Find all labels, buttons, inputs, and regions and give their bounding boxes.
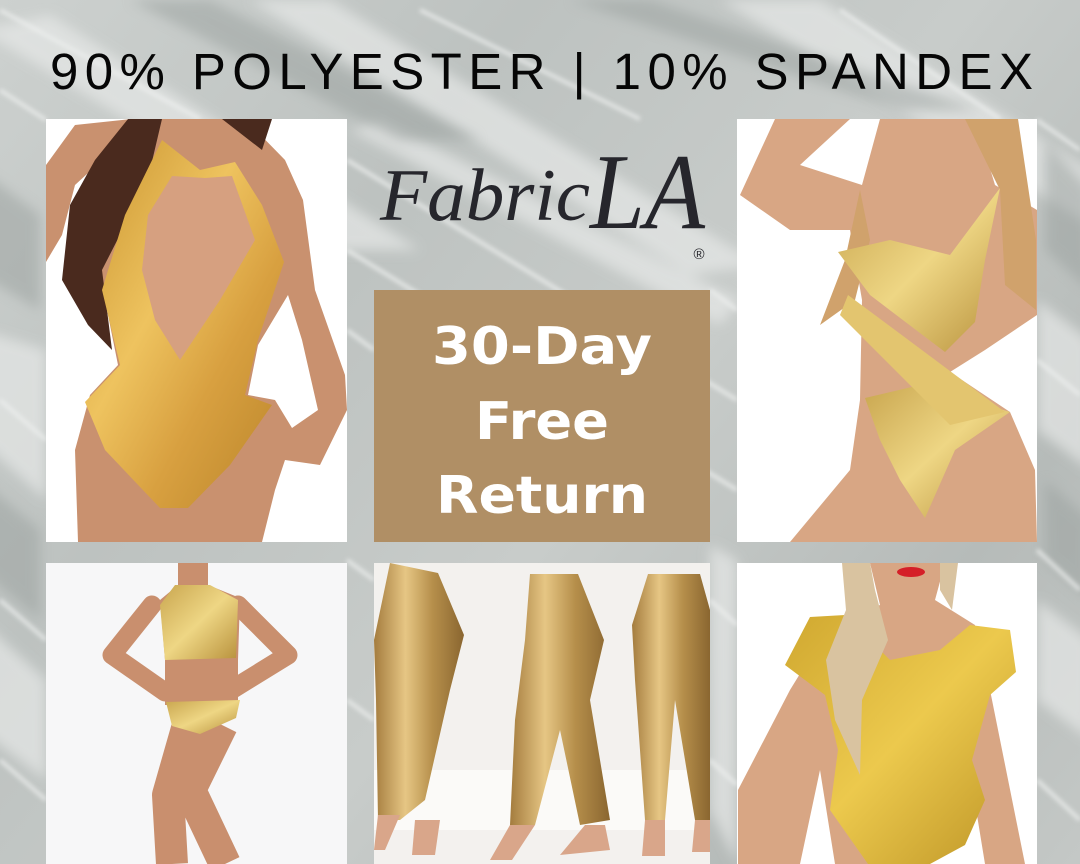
- face and arms: [738, 563, 1025, 864]
- cross strap: [840, 295, 1005, 425]
- return text: [432, 317, 652, 526]
- return text: 30-Day: [432, 317, 652, 377]
- registered mark: ®: [693, 246, 705, 263]
- bodysuit bottom: [865, 385, 1010, 518]
- gap under arm: [248, 295, 318, 428]
- neckline opening: [142, 176, 255, 360]
- title: 90% POLYESTER | 10% SPANDEX: [50, 43, 1033, 100]
- bodysuit top: [838, 188, 1000, 352]
- torso, arm and legs: [75, 119, 347, 542]
- briefs: [166, 700, 240, 734]
- panel: gold short-sleeve bodysuit photo: [737, 563, 1037, 864]
- legs: [168, 725, 225, 864]
- logo: [379, 133, 706, 263]
- crop top: [160, 585, 238, 660]
- arms: [112, 605, 288, 692]
- hair: [62, 119, 272, 350]
- right leggings: [632, 574, 710, 820]
- return text: Free: [475, 392, 609, 452]
- return text: Return: [436, 466, 648, 526]
- swimsuit: [85, 140, 284, 508]
- hair: [820, 119, 1036, 325]
- neck and torso: [160, 563, 240, 705]
- feet: [374, 815, 710, 860]
- logo: Fabric: [379, 155, 590, 237]
- panel: gold strappy bodysuit photo: [737, 119, 1037, 542]
- panel: gold halter swimsuit photo: [46, 119, 347, 542]
- arms and body: [740, 119, 1037, 542]
- lips: [897, 567, 925, 577]
- panel: gold crop top and briefs photo: [46, 563, 347, 864]
- panel: 30-day free return: [374, 290, 710, 542]
- bodysuit: [785, 615, 1016, 864]
- centre leggings: [510, 574, 610, 825]
- panel: gold leggings photo: [374, 563, 710, 864]
- hair: [826, 563, 958, 775]
- logo initials: LA: [588, 133, 706, 252]
- left leggings: [374, 563, 464, 820]
- raised arm: [46, 119, 138, 262]
